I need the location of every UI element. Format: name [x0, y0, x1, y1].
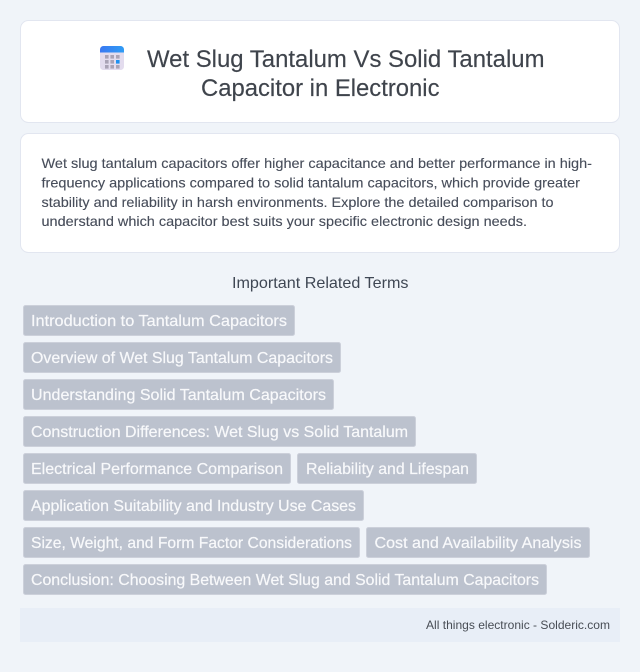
text block: description: Wet slug tantalum capacitors offer higher capacitance and better performance in high-: [42, 155, 592, 171]
tag: electrical: Electrical Performance Comparison: [31, 461, 283, 478]
text block: description: stability and reliability in harsh environments. Explore the detailed comparison to: [42, 194, 554, 210]
panel: description: [20, 134, 620, 252]
title: Wet Slug Tantalum Vs Solid Tantalum: [147, 46, 544, 73]
tag: understanding: Understanding Solid Tantalum Capacitors: [31, 387, 326, 404]
tag: overview: [24, 342, 340, 372]
text block: description: frequency applications compared to solid tantalum capacitors, which provide greater: [42, 174, 580, 190]
tag: conclusion: Conclusion: Choosing Between Wet Slug and Solid Tantalum Capacitors: [31, 572, 539, 589]
tag: understanding: [24, 380, 334, 410]
tag: conclusion: [24, 564, 546, 594]
footer: All things electronic - Solderic.com: [426, 618, 610, 632]
title: [147, 46, 544, 102]
tag: reliability: [298, 454, 476, 484]
tag: application: Application Suitability and Industry Use Cases: [31, 498, 356, 515]
tag: cost: [366, 528, 590, 558]
heading: important related terms: Important Related Terms: [232, 275, 408, 292]
tag list: [24, 306, 590, 594]
icon: calendar: [100, 46, 124, 70]
tag: size: [24, 528, 360, 558]
tag: size: Size, Weight, and Form Factor Considerations: [31, 535, 352, 552]
tag: electrical: [24, 454, 290, 484]
footer: [20, 608, 620, 642]
tag: cost: Cost and Availability Analysis: [374, 535, 582, 552]
text block: description: understand which capacitor best suits your specific electronic design needs.: [42, 213, 527, 229]
text block: description: [42, 155, 592, 229]
tag: application: [24, 490, 364, 520]
tag: construction: Construction Differences: Wet Slug vs Solid Tantalum: [31, 424, 408, 441]
tag: introduction: [24, 306, 294, 336]
panel: title header: [20, 20, 620, 122]
title: Capacitor in Electronic: [201, 75, 440, 102]
tag: introduction: Introduction to Tantalum Capacitors: [31, 313, 287, 330]
tag: construction: [24, 416, 416, 446]
tag: overview: Overview of Wet Slug Tantalum Capacitors: [31, 350, 333, 367]
tag: reliability: Reliability and Lifespan: [306, 461, 469, 478]
